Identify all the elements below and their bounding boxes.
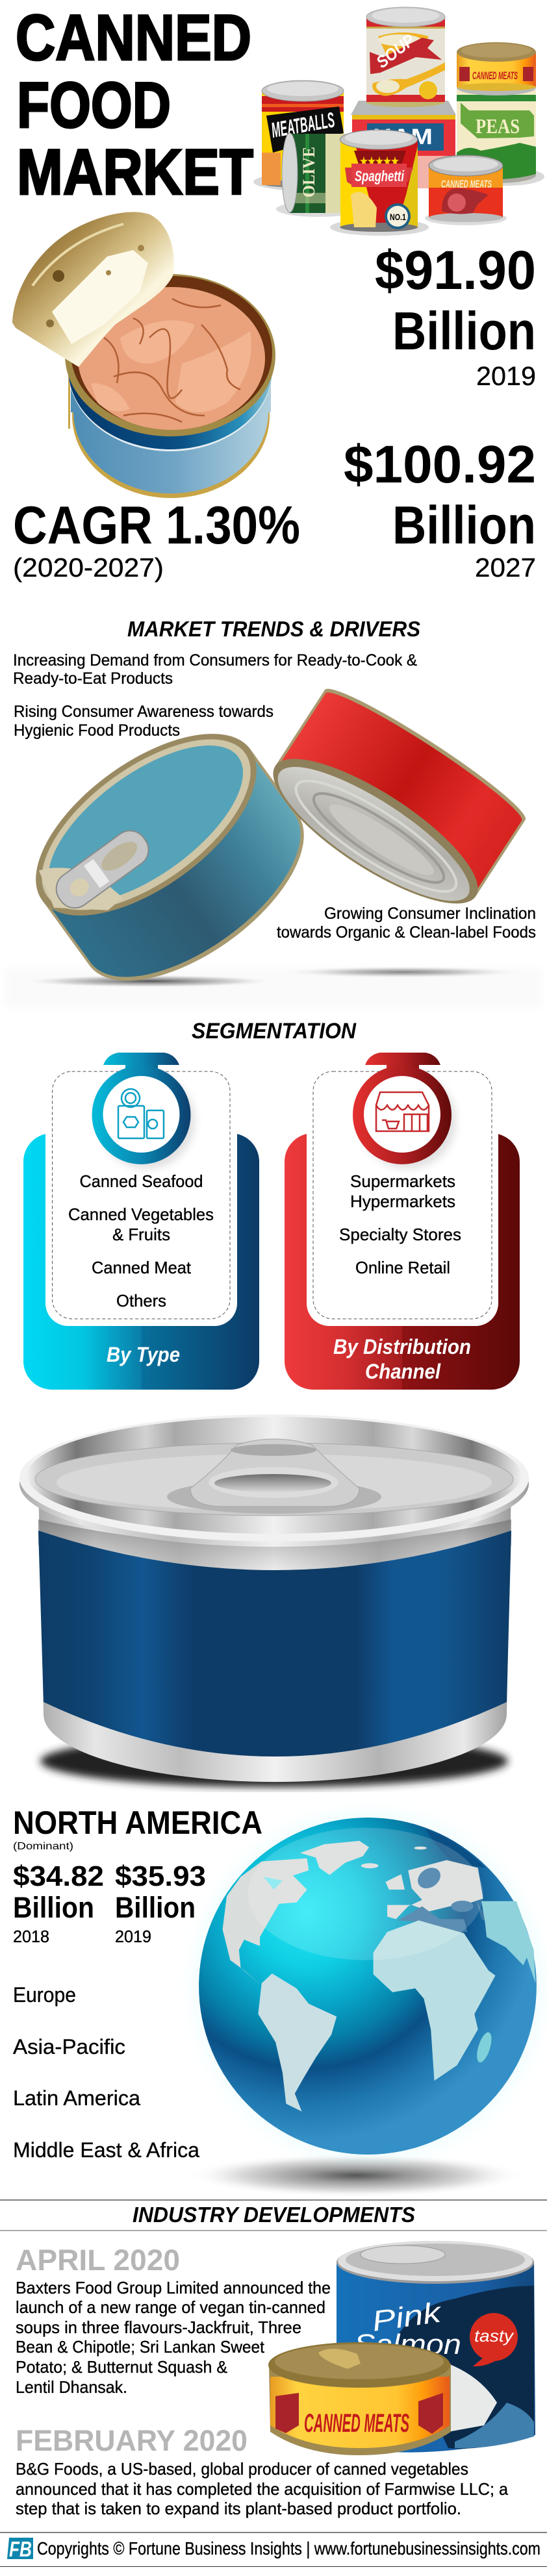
- panel: by type: & Fruits: [112, 1225, 170, 1244]
- regional stats: Middle East & Africa: [13, 2138, 200, 2162]
- regional stats: Billion: [115, 1891, 196, 1924]
- medal icon: store: [353, 1053, 456, 1169]
- can: peas: [457, 80, 536, 183]
- drivers text: Increasing Demand from Consumers for Ready-to-Cook &: [13, 651, 417, 669]
- logo: FB: [9, 2537, 32, 2561]
- panel: by distribution channel: [285, 1053, 520, 1390]
- stat: CAGR: (2020-2027): [13, 553, 164, 582]
- can: meatballs: [262, 81, 344, 188]
- heading: segmentation: SEGMENTATION: [192, 1019, 357, 1044]
- panel: by distribution channel: By Distribution: [333, 1335, 471, 1358]
- regional stats: NORTH AMERICA: [13, 1805, 262, 1841]
- can: olive: [282, 133, 346, 213]
- panel: by distribution channel: Channel: [365, 1360, 441, 1383]
- development: February 2020: FEBRUARY 2020: [16, 2424, 248, 2457]
- stat: 2027 market size: [344, 435, 536, 582]
- panel: by type: Others: [116, 1291, 166, 1310]
- drivers text: towards Organic & Clean-label Foods: [277, 923, 536, 942]
- drivers text: Hygienic Food Products: [14, 721, 180, 740]
- title: [16, 1, 253, 208]
- stat: 2019 market size: 2019: [476, 361, 536, 391]
- panel: by distribution channel: Hypermarkets: [350, 1192, 455, 1211]
- panel: by distribution channel: Supermarkets: [350, 1171, 455, 1191]
- panel: by type: Canned Vegetables: [68, 1205, 214, 1224]
- illustration: salmon can: [337, 2241, 535, 2453]
- pull tab: [167, 1439, 381, 1514]
- can: spaghetti: NO.1: [390, 212, 406, 222]
- regional stats: Latin America: [13, 2086, 141, 2110]
- stat: 2027 market size: 2027: [475, 553, 536, 582]
- regional stats: Europe: [13, 1983, 76, 2007]
- can: spaghetti: Spaghetti: [355, 168, 404, 184]
- drivers text: Growing Consumer Inclination: [324, 905, 536, 923]
- can: soup: SOUP: [372, 30, 418, 72]
- pull ring: [49, 824, 155, 914]
- illustration: salmon can: Pink: [370, 2296, 444, 2338]
- development: April 2020: Bean & Chipotle; Sri Lankan Sweet: [16, 2337, 265, 2357]
- title: FOOD: [17, 69, 171, 141]
- section divider lines: [0, 2199, 547, 2567]
- can: spaghetti: ★★★★★: [360, 155, 400, 168]
- development: April 2020: APRIL 2020: [16, 2244, 180, 2277]
- drivers text: Rising Consumer Awareness towards: [14, 703, 274, 721]
- can: ham: HAM: [373, 125, 433, 149]
- stat: 2019 market size: $91.90: [375, 240, 536, 301]
- panel: by type: [23, 1053, 259, 1390]
- medal icon: cans: [92, 1053, 195, 1169]
- can: stacked canned meats: [457, 42, 536, 91]
- stat: CAGR: [13, 495, 300, 582]
- stat: 2019 market size: [375, 240, 536, 391]
- development: February 2020: announced that it has completed the acquisition of Farmwise LLC; a: [16, 2479, 509, 2499]
- development: February 2020: step that is taken to expand its plant-based product portfolio.: [16, 2499, 461, 2518]
- title: MARKET: [17, 136, 253, 208]
- illustration: globe: [187, 1810, 543, 2197]
- regional stats: Asia-Pacific: [13, 2035, 125, 2058]
- regional stats: Billion: [13, 1891, 94, 1924]
- illustration: canned meats can: [268, 2342, 451, 2455]
- illustration: group of canned foods: [253, 7, 544, 236]
- development: April 2020: soups in three flavours-Jackfruit, Three: [16, 2318, 301, 2337]
- development: February 2020: [16, 2424, 509, 2518]
- can: peas: PEAS: [476, 114, 520, 138]
- title: CANNED: [16, 1, 251, 73]
- regional stats: $34.82: [13, 1860, 104, 1892]
- development: April 2020: [16, 2244, 331, 2397]
- regional stats: $35.93: [115, 1860, 206, 1892]
- shadow under floating cans: [5, 966, 542, 1008]
- can: soup: [366, 7, 445, 107]
- development: April 2020: Lentil Dhansak.: [16, 2377, 127, 2397]
- stat: CAGR: CAGR 1.30%: [13, 495, 300, 555]
- regional stats: 2019: [115, 1927, 151, 1946]
- development: April 2020: Baxters Food Group Limited announced the: [16, 2278, 331, 2297]
- regional stats: [13, 1805, 262, 2162]
- can: small canned meats: [429, 155, 503, 222]
- panel: by type: Canned Meat: [92, 1258, 192, 1277]
- can: spaghetti: [340, 130, 418, 232]
- can: small canned meats: CANNED MEATS: [441, 178, 492, 190]
- tasty badge: tasty: [474, 2326, 515, 2345]
- illustration: opened tuna can: [12, 212, 275, 498]
- panel: by type: By Type: [107, 1343, 180, 1366]
- illustration: blue can: [5, 699, 334, 1016]
- can: ham: [351, 101, 456, 188]
- drivers text: [13, 651, 536, 942]
- illustration: canned meats can: CANNED MEATS: [304, 2409, 409, 2438]
- can: olive: OLIVE: [299, 147, 318, 197]
- development: April 2020: Potato; & Butternut Squash &: [16, 2357, 227, 2377]
- illustration: red can: [255, 678, 533, 928]
- tasty badge: [470, 2313, 518, 2366]
- blue label: [38, 1531, 511, 1757]
- regional stats: 2018: [13, 1927, 49, 1946]
- drivers text: Ready-to-Eat Products: [13, 669, 173, 688]
- heading: market trends and drivers: MARKET TRENDS & DRIVERS: [127, 618, 420, 642]
- panel: by distribution channel: Specialty Stores: [339, 1225, 461, 1244]
- development: April 2020: launch of a new range of vegan tin-canned: [16, 2297, 325, 2317]
- can lid: [12, 212, 174, 367]
- development: February 2020: B&G Foods, a US-based, global producer of canned vegetables: [16, 2459, 468, 2479]
- can: meatballs: MEATBALLS: [270, 107, 337, 142]
- regional stats: (Dominant): [13, 1841, 73, 1852]
- illustration: salmon can: Salmon: [354, 2329, 461, 2360]
- illustration: large metal can: [19, 1414, 529, 1787]
- panel: by distribution channel: Online Retail: [355, 1258, 450, 1277]
- heading: industry developments: INDUSTRY DEVELOPMENTS: [133, 2203, 415, 2227]
- stat: 2027 market size: $100.92: [344, 435, 536, 494]
- panel: by type: Canned Seafood: [79, 1171, 203, 1191]
